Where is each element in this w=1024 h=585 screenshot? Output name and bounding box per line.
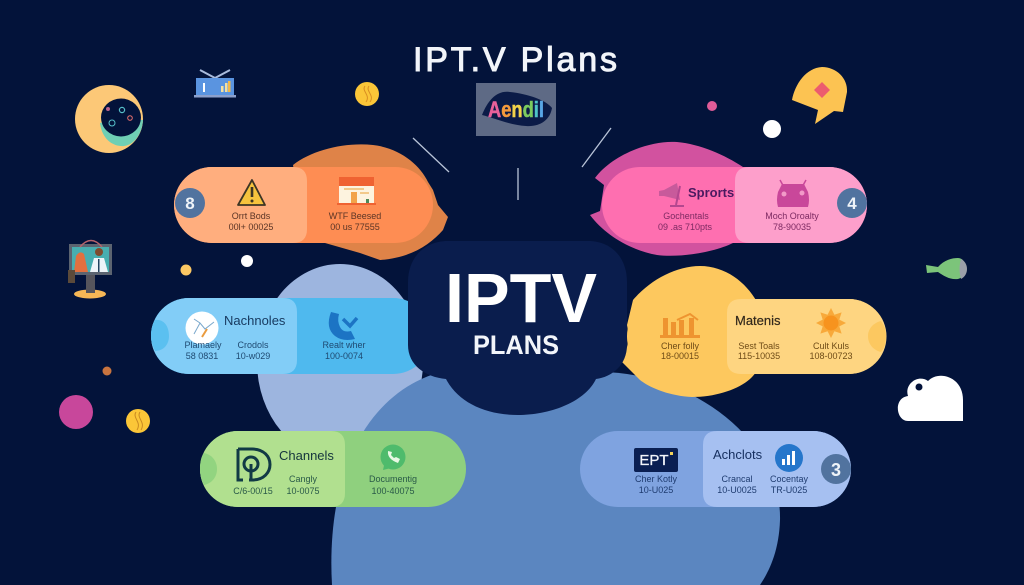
text: column 1: C/6-00/15 [233,486,273,496]
icon: game car [777,180,809,207]
icon: chart circle [186,312,218,344]
panel: yellow plan [620,266,887,397]
icon: speech bubble [792,67,847,124]
text: right: 78-90035 [773,222,811,232]
number badge: 4 [847,194,857,213]
text: column 2: Crodols [237,340,269,350]
panel: periwinkle plan [580,431,851,507]
text: column 1 [635,474,678,495]
text: left: 09 .as 710pts [658,222,713,232]
icon: building calendar [337,177,376,205]
icon: white cloud [898,376,963,421]
number badge: 8 [185,194,195,213]
icon: sun [816,308,846,338]
text: column 2 [236,340,270,361]
logo badge: Aendil [488,97,544,122]
dot: white small [241,255,253,267]
icon: channel logo [238,449,270,480]
text: column 1: Cher Kotly [635,474,678,484]
text: right: Moch Oroalty [765,211,819,221]
text: right: 00 us 77555 [330,222,380,232]
text: column 1 [661,341,700,361]
icon: satellite [659,183,684,206]
icon: EPT logo: EPT [639,452,669,469]
text: left: 00l+ 00025 [229,222,273,232]
text: right: WTF Beesed [329,211,381,221]
text: column 3 [770,474,809,495]
dot: pink [707,101,717,111]
text: column 1: Plamaely [184,340,222,350]
background blob: large blue [331,372,780,585]
background blob: light blue [257,264,423,460]
icon: warning [238,180,265,205]
heading: IPTV: IPTV [445,259,597,337]
text: column 2: Sest Toals [738,341,780,351]
text: left [658,211,713,232]
text: column 2: 10-U0025 [717,485,757,495]
text: right [765,211,819,232]
text: column 3: Documentig [369,474,417,484]
dot: orange [102,366,112,376]
title: IPT.V Plans [413,41,617,79]
number badge [837,188,867,218]
heading: sports: Sprorts [688,185,734,200]
icon: crescent moon [75,85,143,153]
text: column 1: Cher folly [661,341,700,351]
panel: orange plan [174,144,448,260]
text: column 2: 10-0075 [286,486,320,496]
center badge [408,241,627,415]
text: column 3 [809,341,853,361]
icon: coin top [355,82,379,106]
panel: green plan [200,431,466,507]
icon: whatsapp [380,444,406,470]
icon: coin bottom [126,409,150,433]
icon: tv [194,70,236,98]
text: left [229,211,273,232]
text: column 1: 58 0831 [186,351,218,361]
text: column 2 [717,474,757,495]
text: column 2: 10-w029 [236,351,270,361]
text: column 3: Cult Kuls [813,341,850,351]
text: right [329,211,381,232]
icon: green bottle [926,258,967,279]
text: column 2 [286,474,320,496]
text: column 3: TR-U025 [771,485,807,495]
text: column 3: 100-40075 [371,486,415,496]
dot: white [763,120,781,138]
text: column 3 [369,474,417,496]
text: column 2: Crancal [721,474,753,484]
connector lines [413,128,611,200]
text: column 3: Cocentay [770,474,809,484]
text: column 1: 10-U025 [639,485,673,495]
text: column 2 [738,341,780,361]
number badge [175,188,205,218]
icon: monitor with presenter [68,240,112,298]
panel: blue plan [151,298,431,374]
heading: nachnoles: Nachnoles [224,313,286,328]
heading: achclots: Achclots [713,447,763,462]
icon: columns [660,314,700,338]
text: column 3: 108-00723 [809,351,853,361]
number badge [821,454,851,484]
text: column 2: 115-10035 [738,351,780,361]
logo badge [476,83,556,136]
dot: magenta [59,395,93,429]
text: column 3 [322,340,366,361]
icon: EPT logo [634,448,678,472]
text: column 3: 100-0074 [325,351,363,361]
icon: phone [329,312,357,340]
text: left: Gochentals [663,211,709,221]
text: column 2: Cangly [289,474,318,484]
heading: matenis: Matenis [735,313,781,328]
dot: yellow [180,264,192,276]
heading: channels: Channels [279,448,334,463]
subheading: PLANS: PLANS [473,330,559,360]
number badge: 3 [831,460,841,480]
text: column 1 [184,340,222,361]
text: left: Orrt Bods [232,211,271,221]
icon: bars circle [775,444,803,472]
text: column 1: 18-00015 [661,351,699,361]
panel: pink plan [590,142,867,256]
text: column 3: Realt wher [322,340,366,350]
